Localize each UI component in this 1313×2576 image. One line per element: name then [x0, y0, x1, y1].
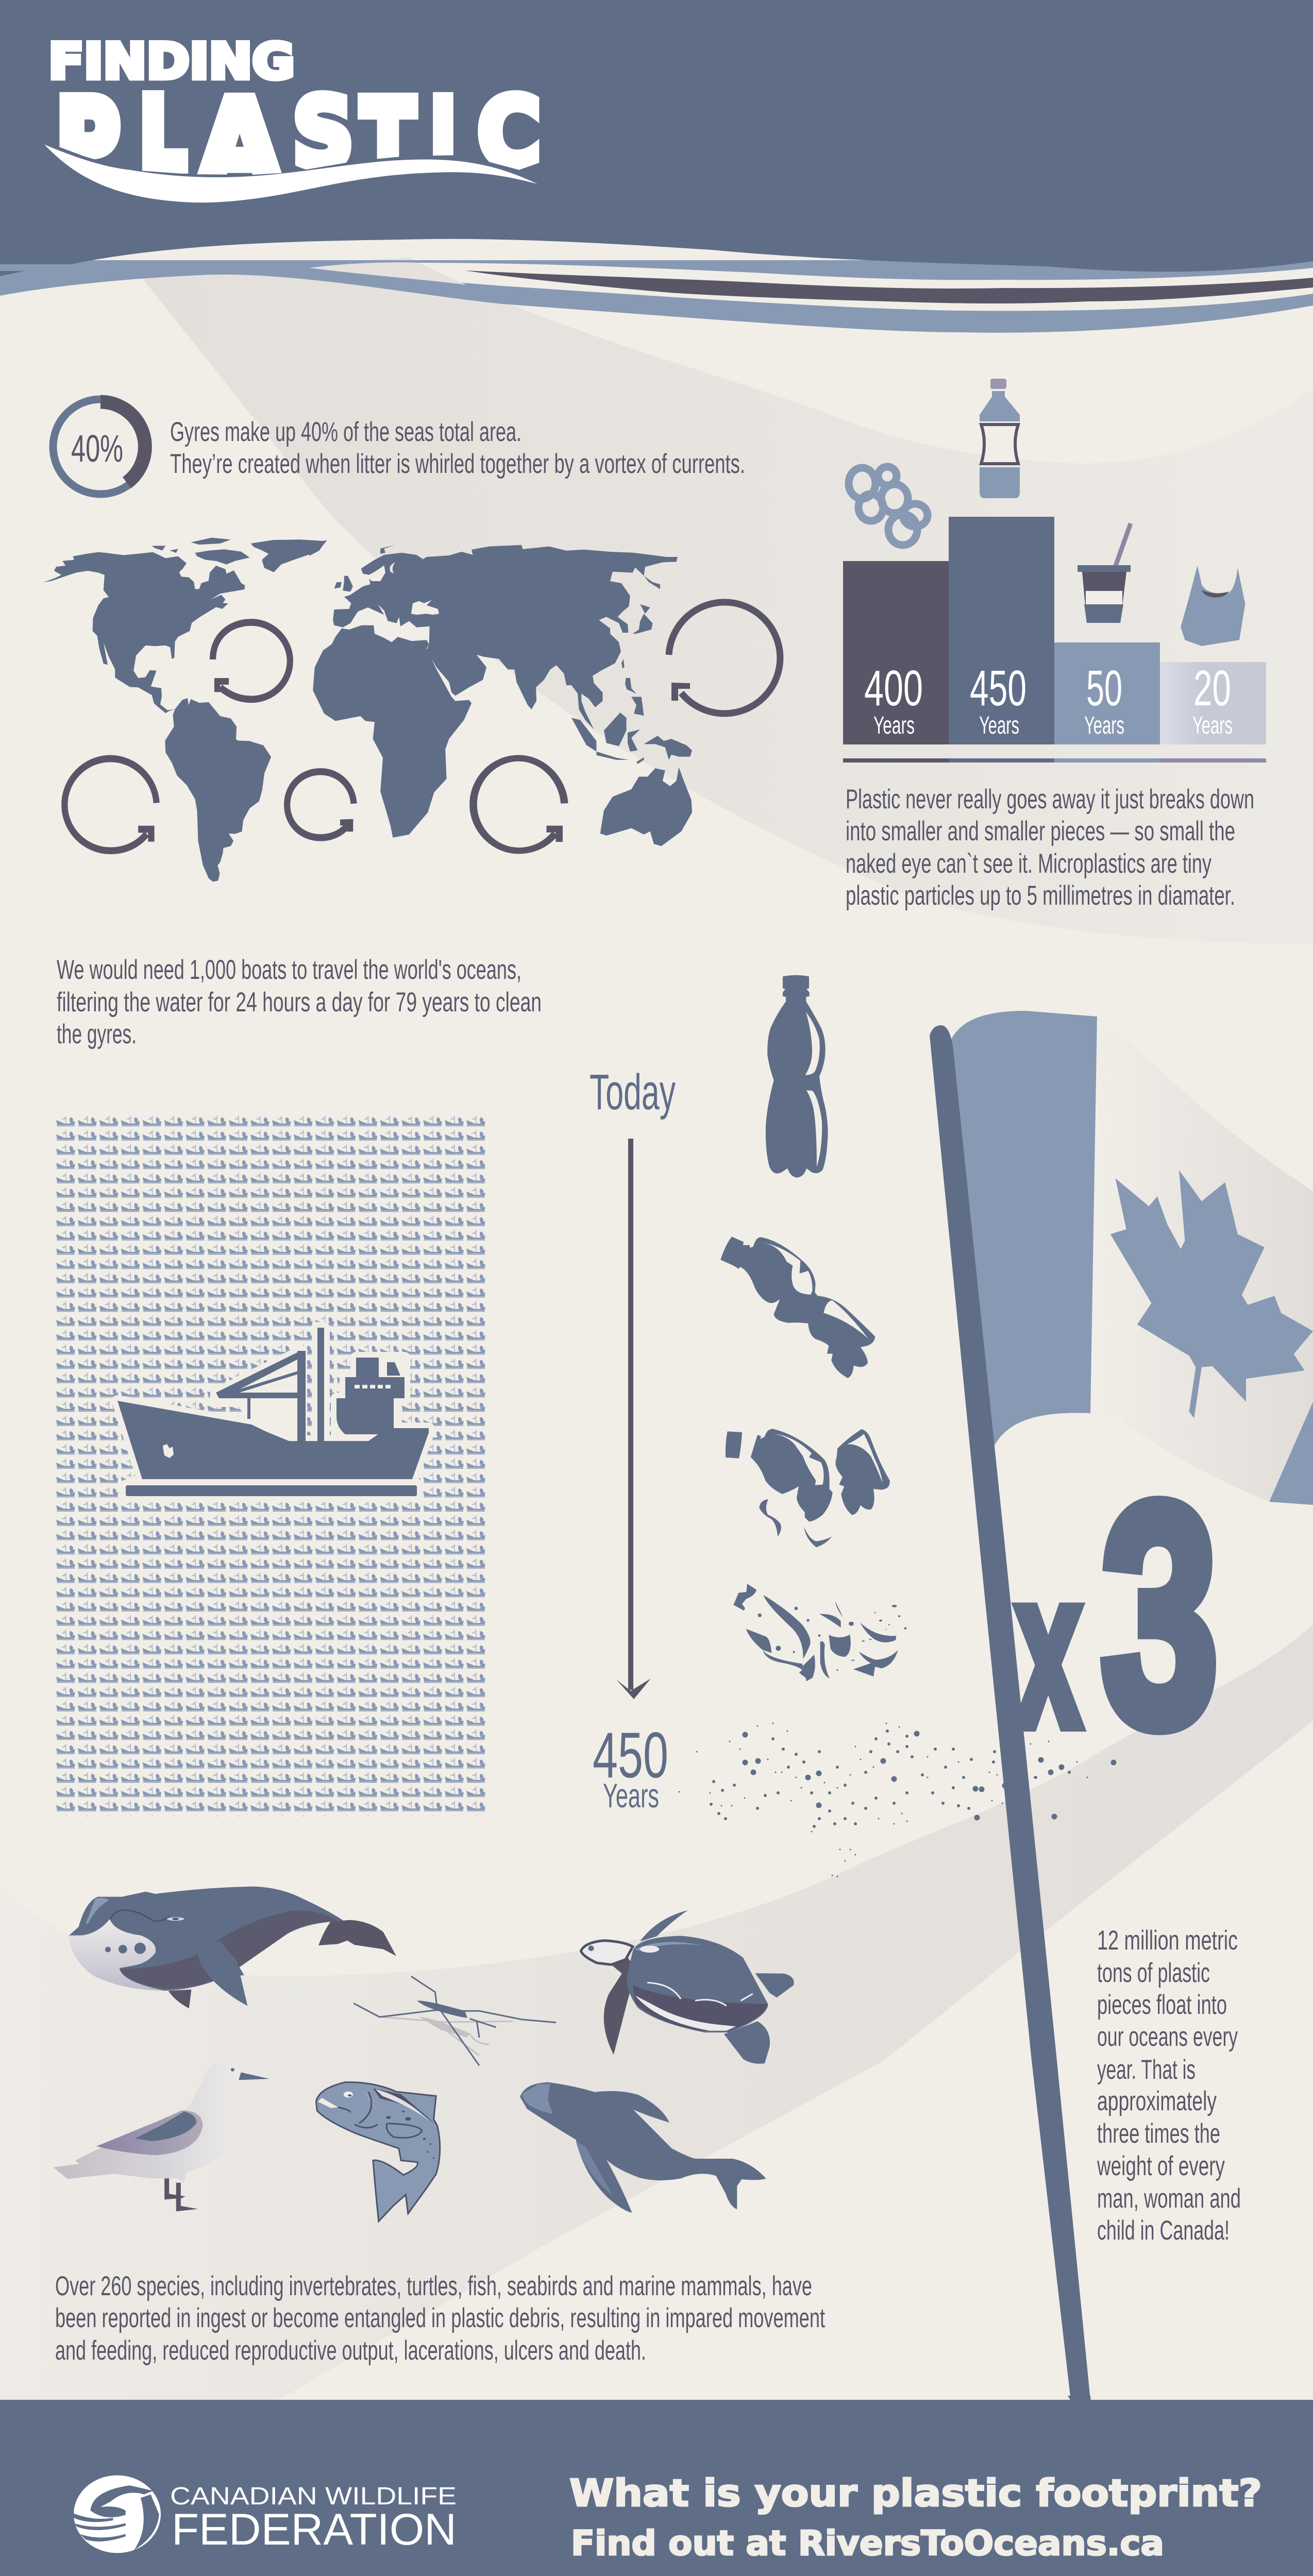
call to action [569, 2471, 1262, 2563]
text: 12 million tons: tons of plastic [1097, 1958, 1210, 1988]
stat: 40% ring: 40% [71, 427, 123, 470]
icon: plastic bottle [980, 379, 1020, 498]
pictogram: grid of boats [56, 1116, 485, 1817]
icon: six-pack rings [849, 467, 928, 545]
bar chart: plastic lifespan: Years [1084, 712, 1124, 739]
text: 1,000 boats: the gyres. [57, 1019, 137, 1049]
bar chart: plastic lifespan: Years [979, 712, 1019, 739]
big text: x3 [1016, 1439, 1218, 1790]
text: 12 million tons: our oceans every [1097, 2022, 1238, 2052]
background swoosh: upper grey [138, 258, 1313, 944]
arrow: today to 450 years: Years [603, 1776, 659, 1815]
flag: left blue band [947, 1011, 1097, 1446]
arrow: today to 450 years [590, 1064, 676, 1815]
arrow: Atlantic and Pacific gyres [64, 622, 354, 851]
title: Finding Plastic: S [293, 77, 354, 189]
call to action: Find out at RiversToOceans.ca [571, 2523, 1164, 2563]
footer panel [0, 2396, 1313, 2576]
icon: whale [69, 1887, 396, 2008]
icon: sea turtle [581, 1910, 794, 2064]
chart: plastic particles [679, 1723, 1114, 1876]
logo: Canadian Wildlife Federation: FEDERATION [172, 2505, 457, 2554]
text: 12 million tons: man, woman and [1097, 2183, 1241, 2214]
title: Finding Plastic: L [140, 77, 186, 192]
text: 12 million tons: year. That is [1097, 2055, 1196, 2085]
title: Finding Plastic: P [56, 74, 120, 211]
title: Finding Plastic: FINDING [48, 33, 295, 90]
text: gyres [170, 417, 745, 479]
text: 260 species: Over 260 species, including invertebrates, turtles, fish, seabirds and marine mammals, have [55, 2271, 812, 2301]
flag of Canada [947, 1011, 1313, 1505]
text: 1,000 boats: filtering the water for 24 hours a day for 79 years to clean [57, 987, 542, 1018]
text: 260 species: and feeding, reduced reproductive output, lacerations, ulcers and death. [55, 2335, 646, 2366]
icon: cup with straw [1078, 523, 1131, 623]
arrow: north Pacific gyre [669, 602, 780, 714]
bar chart: plastic lifespan: 20 [1193, 660, 1231, 716]
world map [43, 538, 692, 882]
text: 12 million tons: approximately [1097, 2086, 1217, 2116]
logo: Canadian Wildlife Federation: CANADIAN WILDLIFE [170, 2483, 457, 2510]
text: 12 million tons: child in Canada! [1097, 2215, 1230, 2246]
text: 12 million tons: 12 million metric [1097, 1925, 1238, 1956]
flag: maple leaf [1110, 1170, 1313, 1418]
bar chart: plastic lifespan: Years [1192, 712, 1233, 739]
text: 12 million tons: three times the [1097, 2119, 1220, 2149]
icon: broken bottle [726, 1429, 890, 1547]
text: gyres: Gyres make up 40% of the seas total area. [170, 417, 521, 447]
big text: x3: 3 [1101, 1439, 1218, 1790]
icon: plastic bag [1181, 566, 1245, 646]
text: 260 species [55, 2271, 825, 2366]
icon: large ship [117, 1328, 429, 1496]
icon: water strider [354, 1976, 556, 2065]
icon: gyre arrows [64, 602, 780, 851]
text: 260 species: been reported in ingest or become entangled in plastic debris, resulting in impared movement [55, 2303, 825, 2333]
bar chart: plastic lifespan: Years [873, 712, 915, 739]
map: Europe, Africa, Asia, Australia [309, 540, 692, 846]
icon: whole bottle [766, 975, 828, 1178]
icon: bottle fragments [733, 1584, 906, 1685]
text: 1,000 boats [57, 955, 542, 1049]
flag pole [930, 1025, 1091, 2453]
stat: 40% ring [53, 399, 148, 494]
bar chart: plastic lifespan: 50 [1086, 660, 1122, 716]
map: the Americas and Greenland [43, 538, 326, 882]
text: 12 million tons: pieces float into [1097, 1990, 1227, 2020]
bar chart: plastic lifespan [843, 517, 1266, 762]
arrow: Indian Ocean gyre [473, 758, 564, 851]
title: Finding Plastic [33, 33, 578, 217]
title: Finding Plastic: I [430, 74, 457, 211]
bar chart: plastic lifespan: 400 [864, 660, 923, 716]
background swoosh: lower grey [0, 1624, 1313, 2401]
title: Finding Plastic: T [361, 74, 415, 211]
title: Finding Plastic: C [478, 77, 541, 189]
icon: seal [520, 2082, 766, 2213]
text: gyres: They’re created when litter is whirled together by a vortex of currents. [170, 449, 745, 479]
flag: right blue band [1269, 1402, 1313, 1505]
bar chart: plastic lifespan: 450 [970, 660, 1026, 716]
text: 1,000 boats: We would need 1,000 boats to travel the world's oceans, [57, 955, 521, 985]
arrow: today to 450 years: 450 [593, 1720, 668, 1791]
call to action: What is your plastic footprint? [569, 2471, 1262, 2515]
header: waves and ribbons [0, 0, 1313, 333]
text: microplastics [846, 784, 1254, 911]
icon: crumpled bottle [720, 1236, 875, 1378]
logo: Canadian Wildlife Federation [71, 2476, 457, 2554]
title: Finding Plastic: A [198, 74, 281, 211]
text: 12 million tons: weight of every [1097, 2151, 1225, 2181]
arrow: today to 450 years: Today [590, 1064, 676, 1120]
text: 12 million tons [1097, 1925, 1241, 2246]
icon: seagull [54, 2061, 270, 2211]
icon: salmon [316, 2082, 440, 2222]
big text: x3: x [1016, 1527, 1081, 1772]
